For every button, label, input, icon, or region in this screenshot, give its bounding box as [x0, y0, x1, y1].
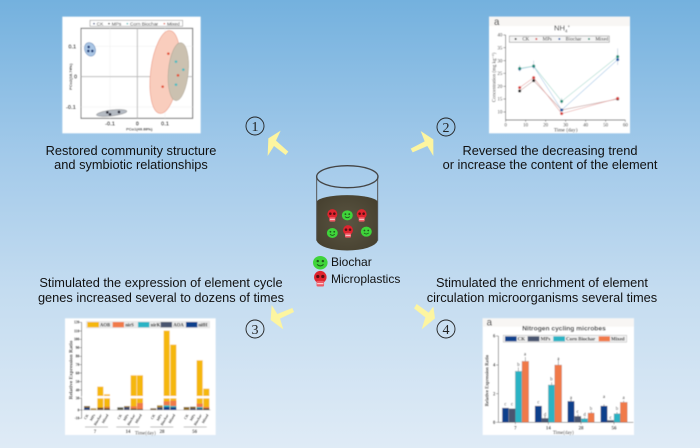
- label: number 2: [437, 118, 455, 136]
- stacked chart axes: 50: [76, 380, 80, 384]
- line chart legend: Biochar: [566, 38, 582, 43]
- stacked chart axes: Relative Expression Ratio: [69, 340, 75, 399]
- bar chart axes: Time(day): [553, 431, 574, 436]
- stacked chart x labels: CK: [83, 413, 90, 420]
- stacked chart x labels: CK: [150, 413, 156, 420]
- arrow: to upper left: [268, 131, 288, 156]
- stacked chart axes: [69, 321, 211, 421]
- label: number 1: [246, 117, 264, 135]
- line chart axes: 40: [583, 124, 589, 129]
- heading: element content: Reversed the decreasing trend: [462, 143, 638, 158]
- bar chart axes: Relative Expression Ratio: [486, 354, 491, 406]
- panel: NH4+ concentration line chart: [489, 17, 630, 134]
- PCoA plot frame and axes: PCo1(49.69%): [126, 126, 153, 131]
- PCoA group ellipses: [83, 29, 191, 118]
- stacked chart legend: AOA: [173, 323, 184, 328]
- significance letters: a: [557, 357, 560, 362]
- stacked chart axes: 100: [74, 338, 80, 342]
- label: number 4: 4: [442, 323, 450, 338]
- stacked chart x labels: Mixed: [201, 413, 210, 424]
- line chart axes: 30: [497, 59, 503, 64]
- stacked chart x labels: MPs: [123, 413, 130, 422]
- arrow: to lower left: [271, 305, 294, 329]
- line chart axes: Concentration (mg kg⁻¹): [491, 52, 497, 102]
- legend: biochar: Biochar: [331, 255, 372, 269]
- stacked chart axes: 80: [76, 355, 80, 359]
- PCoA plot frame and axes: 0.1: [68, 44, 76, 50]
- bar chart title: Nitrogen cycling microbes: [522, 325, 606, 332]
- stacked chart x labels: Biochar: [93, 413, 103, 426]
- beaker soil: [317, 195, 378, 251]
- significance letters: b: [517, 363, 520, 368]
- stacked chart axes: 40: [76, 388, 80, 392]
- heading: community structure: and symbiotic relationships: [54, 157, 208, 172]
- panel: NH4+ concentration line chart: a: [494, 17, 500, 28]
- stacked chart legend: nirK: [151, 323, 161, 328]
- heading: microorganism enrichment: circulation microorganisms several times: [427, 290, 657, 305]
- bar chart legend: [503, 335, 627, 343]
- line chart axes: 40: [497, 34, 503, 39]
- stacked chart x labels: MPs: [89, 413, 96, 422]
- PCoA plot frame and axes: -0.1: [105, 121, 115, 127]
- stacked chart x labels: Mixed: [101, 413, 110, 424]
- PCoA legend: CK: [97, 21, 104, 27]
- panel: PCoA community structure chart: [62, 17, 201, 133]
- label: number 3: 3: [252, 323, 258, 338]
- beaker glass outline: [317, 177, 378, 241]
- bar chart axes: 7: [514, 427, 517, 432]
- stacked chart x labels: 7: [94, 430, 97, 435]
- line chart axes: 50: [603, 124, 609, 129]
- stacked chart x labels: Mixed: [168, 413, 176, 424]
- label: number 4: [437, 320, 455, 338]
- stacked chart axes: 70: [76, 363, 80, 367]
- bar chart axes: 14: [546, 427, 551, 432]
- bar chart axes: 6: [493, 335, 496, 340]
- significance letters: a: [603, 395, 606, 400]
- stacked chart legend: [86, 321, 210, 328]
- significance letters: c: [577, 410, 580, 415]
- significance letters: c: [537, 400, 540, 405]
- stacked chart x labels: Time(day): [135, 431, 156, 436]
- line chart legend: CK: [522, 38, 530, 43]
- panel: gene expression stacked bar chart: [65, 318, 216, 436]
- significance letters: c: [610, 416, 613, 421]
- central beaker with soil: [317, 166, 378, 251]
- line chart axes: 10: [497, 111, 503, 116]
- PCoA plot frame and axes: -0.1: [66, 105, 76, 111]
- bar chart axes: [486, 335, 633, 436]
- significance letters: a: [570, 396, 573, 401]
- PCoA legend: Mixed: [167, 21, 180, 27]
- stacked chart x labels: CK: [117, 413, 123, 420]
- bar chart legend: Mixed: [611, 338, 625, 343]
- line chart legend: Mixed: [595, 38, 609, 43]
- line chart series: [518, 48, 619, 115]
- legend: microplastics: Microplastics: [331, 272, 400, 286]
- stacked chart axes: 120: [74, 321, 80, 325]
- grouped bars: [502, 361, 627, 422]
- line chart title: NH: [554, 24, 565, 33]
- PCoA legend: Corn Biochar: [130, 21, 159, 27]
- significance letters: b: [590, 407, 593, 412]
- PCoA plot frame and axes: PCo2(18.74%): [68, 63, 73, 90]
- panel: nitrogen cycling microbes bar chart: a: [487, 317, 493, 328]
- bar chart legend: CK: [518, 338, 525, 343]
- line chart title: 4: [565, 29, 568, 34]
- stacked chart x labels: 56: [192, 430, 198, 435]
- PCoA plot frame and axes: 0.1: [161, 121, 169, 127]
- PCoA sample points: [87, 46, 185, 116]
- legend: biochar: [313, 255, 372, 269]
- stacked chart axes: 30: [76, 397, 80, 401]
- microplastic and biochar particles: [327, 209, 372, 238]
- stacked chart x labels: MPs: [189, 413, 196, 422]
- stacked chart axes: 90: [76, 346, 80, 350]
- line chart axes: 20: [543, 124, 549, 129]
- PCoA legend: MPs: [112, 21, 122, 27]
- line chart legend: MPs: [543, 38, 552, 43]
- significance letters: d: [544, 413, 547, 418]
- heading: element content: or increase the content of the element: [443, 157, 658, 172]
- line chart axes: 20: [497, 85, 503, 90]
- line chart axes: 0: [504, 124, 507, 129]
- bar chart legend: MPs: [541, 338, 550, 343]
- line chart axes: 35: [497, 46, 503, 51]
- heading: community structure: Restored community structure: [46, 143, 216, 158]
- line chart axes: Time (day): [554, 127, 578, 134]
- significance letters: d: [583, 413, 586, 418]
- significance letters: a: [524, 352, 527, 357]
- stacked chart x labels: Biochar: [127, 413, 136, 426]
- error bars: [518, 357, 624, 419]
- heading: gene expression: genes increased several to dozens of times: [38, 290, 284, 305]
- significance letters: b: [550, 378, 553, 383]
- PCoA plot frame and axes: [66, 28, 193, 131]
- line chart axes: 25: [497, 72, 503, 77]
- line chart axes: 15: [497, 98, 503, 103]
- PCoA legend: [90, 20, 183, 27]
- line chart axes: [491, 34, 628, 134]
- line chart legend: [509, 36, 609, 43]
- stacked chart legend: AOB: [100, 323, 110, 328]
- bar chart axes: 2: [493, 392, 496, 397]
- stacked chart x labels: Mixed: [134, 413, 143, 424]
- PCoA plot frame and axes: 0: [136, 121, 139, 127]
- stacked chart axes: 110: [74, 329, 79, 333]
- label: number 3: [246, 320, 264, 338]
- stacked chart x labels: Biochar: [160, 413, 170, 426]
- arrow: to upper right: [411, 131, 433, 156]
- stacked chart x labels: Biochar: [193, 413, 203, 426]
- significance letters: b: [616, 407, 619, 412]
- bar chart axes: 0: [493, 421, 496, 426]
- stacked chart x labels: CK: [183, 413, 190, 420]
- line chart title: +: [567, 24, 570, 29]
- stacked chart axes: 0: [78, 408, 80, 412]
- label: number 2: 2: [442, 121, 450, 136]
- stacked chart axes: -10: [74, 417, 80, 421]
- significance letters: c: [511, 403, 514, 408]
- bar chart axes: 4: [493, 364, 496, 369]
- significance letters: c: [504, 403, 507, 408]
- significance letters: [504, 352, 626, 421]
- line chart axes: 10: [523, 124, 529, 129]
- heading: microorganism enrichment: Stimulated the enrichment of element: [436, 275, 648, 290]
- significance letters: a: [623, 396, 626, 401]
- bar chart axes: 56: [612, 427, 617, 432]
- panel: nitrogen cycling microbes bar chart: [483, 317, 634, 436]
- stacked chart x labels: [83, 413, 210, 436]
- bar chart axes: 28: [579, 427, 584, 432]
- heading: gene expression: Stimulated the expression of element cycle: [39, 275, 283, 290]
- line chart axes: 60: [623, 124, 628, 129]
- beaker rim: [317, 166, 378, 188]
- line chart axes: 30: [563, 124, 569, 129]
- stacked chart x labels: 14: [126, 430, 131, 435]
- label: number 1: 1: [252, 120, 258, 135]
- stacked chart x labels: 28: [160, 430, 165, 435]
- stacked bars: [82, 331, 211, 410]
- bar chart legend: Corn Biochar: [566, 338, 596, 343]
- stacked chart legend: nirS: [125, 323, 134, 328]
- stacked chart legend: nifH: [198, 323, 208, 328]
- PCoA plot frame and axes: 0: [74, 75, 77, 81]
- arrow: to lower right: [414, 304, 435, 329]
- stacked chart axes: 60: [76, 371, 80, 375]
- stacked chart x labels: MPs: [156, 413, 163, 422]
